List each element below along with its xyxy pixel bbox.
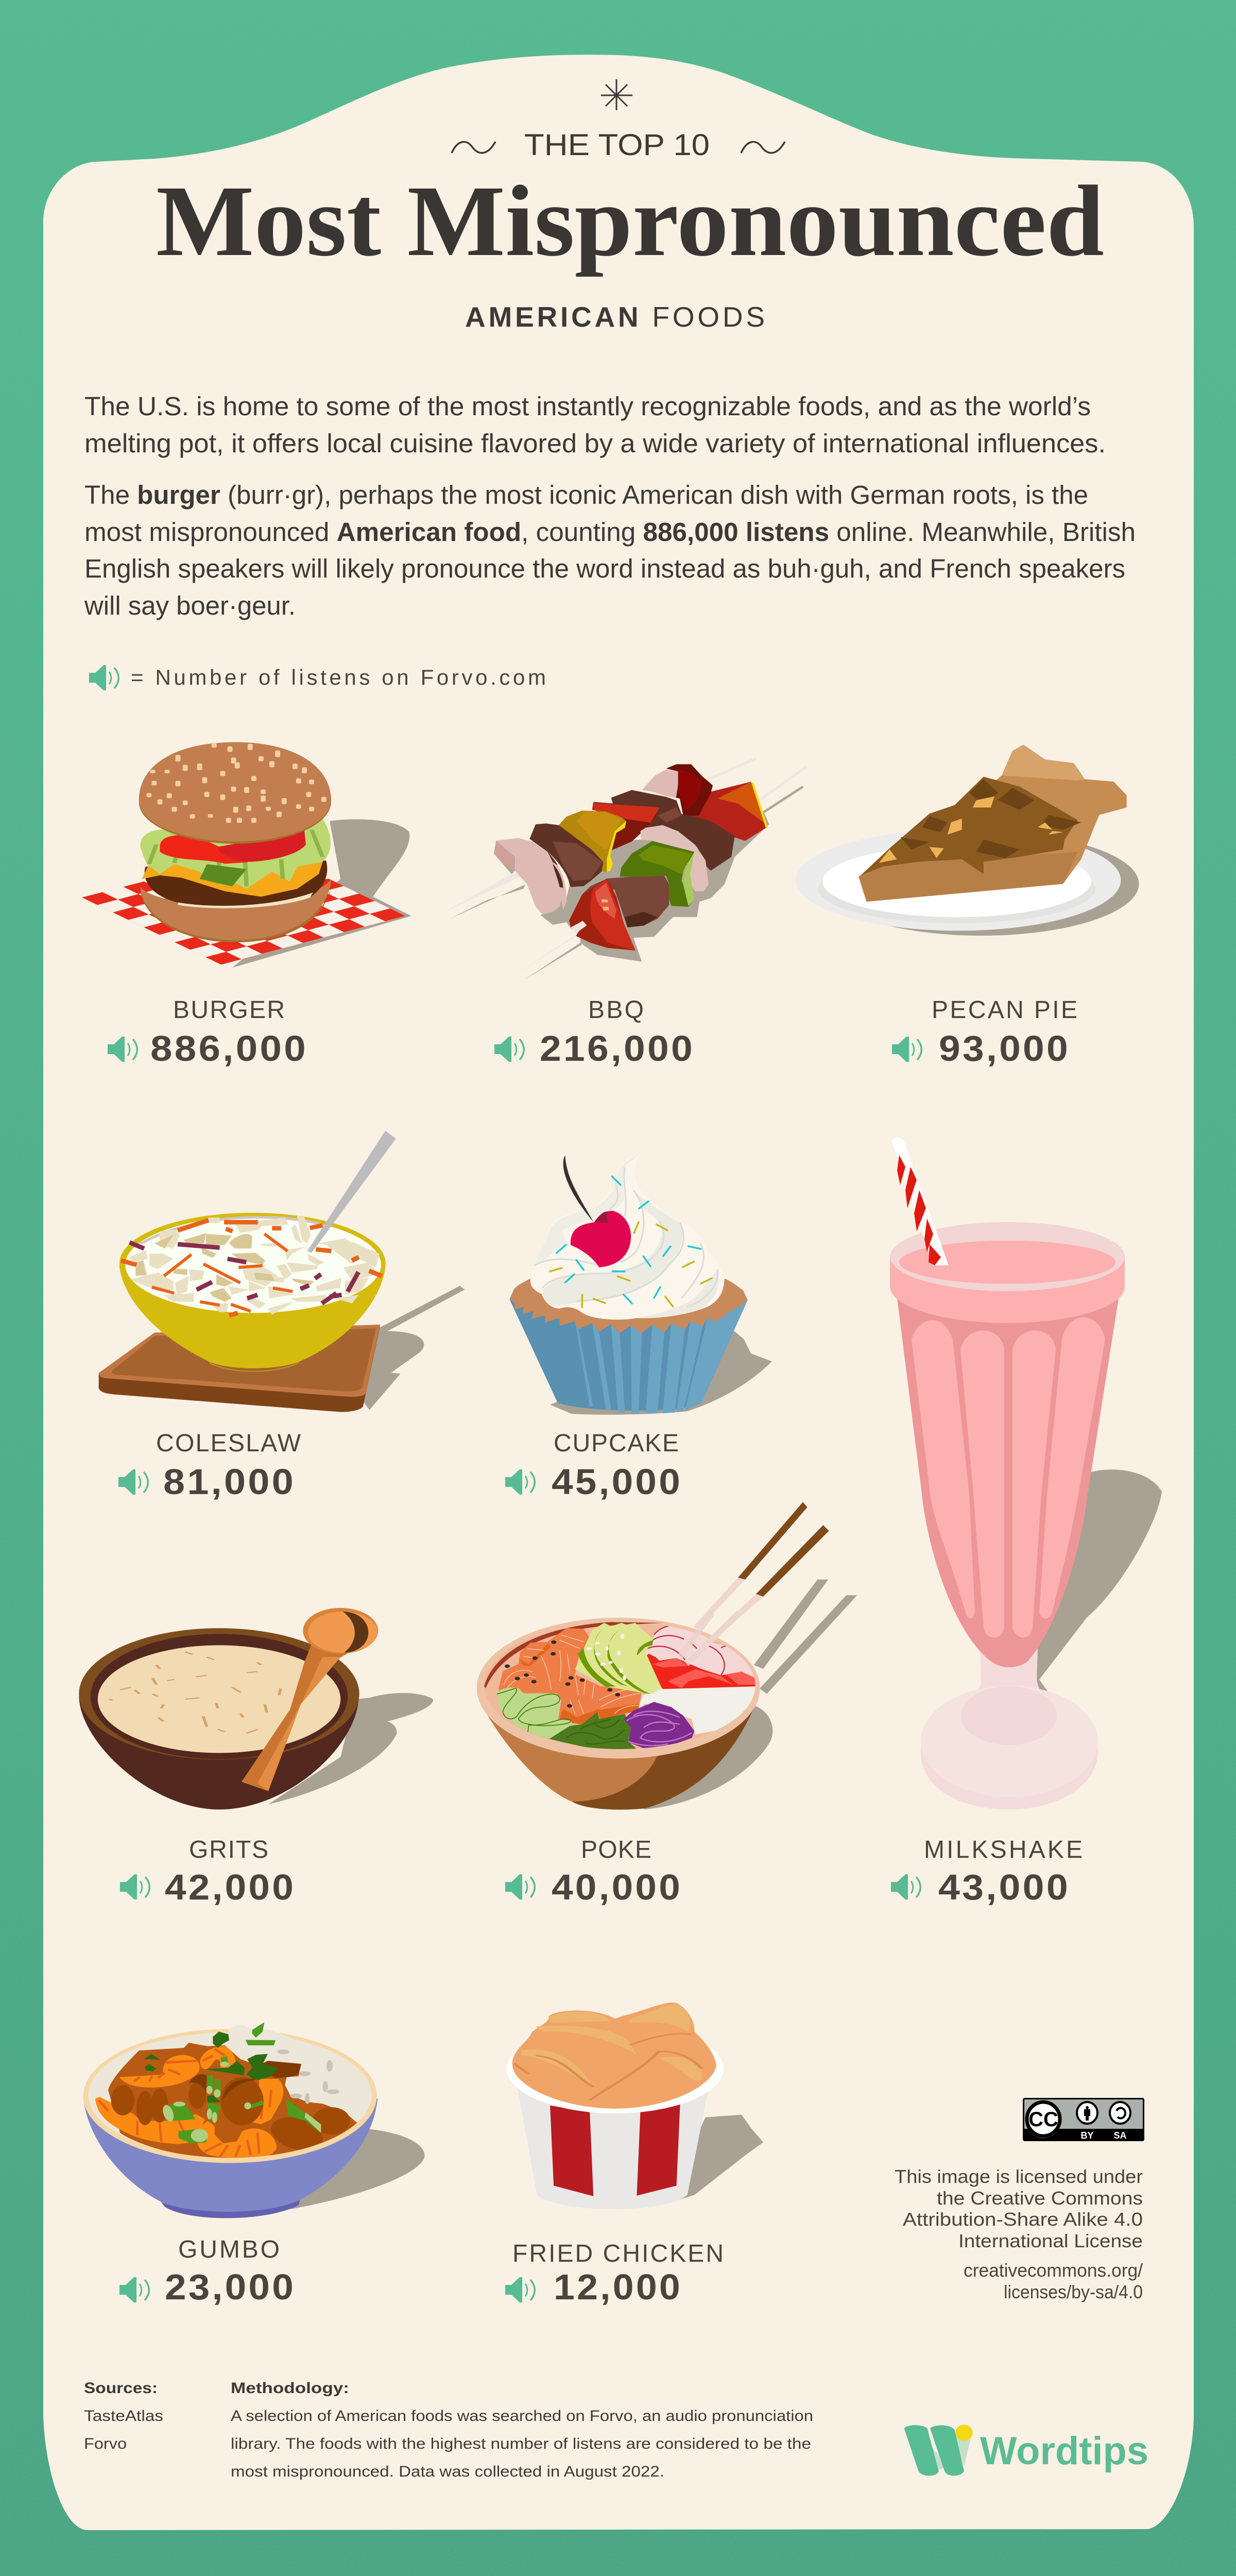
icon: speaker [892, 1037, 921, 1062]
text block: burger paragraph [84, 480, 1136, 620]
sprinkles [550, 1176, 712, 1307]
badge: creative commons: SA [1113, 2130, 1127, 2141]
value: fried chicken: 12,000 [554, 2267, 682, 2307]
food: poke bowl [477, 1618, 760, 1809]
glass body [897, 1298, 1119, 1667]
value: milkshake: 43,000 [938, 1867, 1070, 1907]
text block: intro: The U.S. is home to some of the most instantly recognizable foods, and as the world’s [84, 392, 1091, 421]
text block: methodology [231, 2380, 813, 2480]
icon: speaker [119, 2277, 149, 2302]
label: bbq: BBQ [588, 996, 644, 1024]
straw [892, 1138, 949, 1265]
logo mark [904, 2425, 973, 2476]
shadow: gumbo [290, 2129, 424, 2209]
chopsticks [680, 1502, 829, 1664]
food: grits [79, 1608, 433, 1809]
icon: speaker [505, 1469, 535, 1495]
base and stem [921, 1649, 1098, 1809]
label: gumbo: GUMBO [178, 2236, 280, 2263]
text block: methodology: library. The foods with the highest number of listens are considered to be the [231, 2435, 811, 2452]
icon: speaker [505, 2277, 535, 2302]
chopstick tips [680, 1613, 739, 1664]
glass rim bulge [890, 1257, 1125, 1323]
text block: sources: Sources: [84, 2380, 158, 2397]
label: milkshake: MILKSHAKE [924, 1836, 1083, 1863]
icon: right wave [741, 142, 785, 153]
item labels row 3 [120, 1836, 1083, 1907]
value: pecan pie: 93,000 [939, 1028, 1070, 1069]
cherry stem [563, 1156, 594, 1223]
value: coleslaw: 81,000 [163, 1462, 296, 1502]
shadow: coleslaw [340, 1286, 465, 1410]
text block: burger paragraph: English speakers will likely pronounce the word instead as buh·guh, and French speakers [84, 554, 1125, 583]
pecan pie illustration [796, 744, 1139, 936]
badge: creative commons [1023, 2098, 1144, 2141]
text block: intro [84, 392, 1106, 458]
cherry [571, 1211, 631, 1267]
bowl [83, 2025, 377, 2218]
parsley [213, 2031, 229, 2048]
stew [95, 2043, 372, 2160]
logo wordmark: Wordtips [980, 2429, 1148, 2473]
value: bbq: 216,000 [540, 1028, 695, 1069]
icon: left wave [452, 142, 495, 153]
milk surface [899, 1241, 1115, 1284]
icon: speaker [494, 1037, 524, 1062]
icon: speaker [89, 665, 118, 690]
item labels row 1 [108, 996, 1077, 1069]
text block: license: Attribution-Share Alike 4.0 [903, 2209, 1143, 2230]
icon: speaker [108, 1037, 137, 1062]
text block: methodology: most mispronounced. Data was collected in August 2022. [231, 2463, 664, 2480]
chopstick tops [738, 1502, 829, 1597]
label: pecan pie: PECAN PIE [932, 996, 1077, 1024]
rim ring [890, 1222, 1125, 1291]
food: pecan pie [796, 744, 1139, 936]
logo: wordtips [904, 2425, 1148, 2476]
frosting [530, 1154, 725, 1319]
text block: methodology: Methodology: [231, 2380, 349, 2397]
subtitle: AMERICAN FOODS [465, 301, 765, 333]
text block: burger paragraph: most mispronounced American food, counting 886,000 listens online. Meanwhile, British [84, 517, 1136, 547]
value: grits: 42,000 [165, 1867, 296, 1907]
icon: star ornament [601, 79, 632, 110]
wrapper [509, 1299, 748, 1413]
legend [89, 665, 546, 690]
garnish [246, 2022, 276, 2045]
value: cupcake: 45,000 [552, 1462, 682, 1502]
label: grits: GRITS [189, 1836, 268, 1863]
label: cupcake: CUPCAKE [554, 1430, 679, 1457]
text block: sources [84, 2380, 163, 2452]
fried chicken illustration [507, 2003, 763, 2209]
badge: creative commons: CC [1028, 2108, 1058, 2131]
food: coleslaw [99, 1131, 396, 1412]
slaw [121, 1216, 382, 1315]
label: poke: POKE [581, 1836, 651, 1863]
value: poke: 40,000 [552, 1867, 682, 1907]
cake [509, 1279, 748, 1333]
grits illustration [79, 1608, 433, 1809]
text block: license: the Creative Commons [937, 2188, 1143, 2209]
glass flutes [912, 1317, 1105, 1638]
text block: burger paragraph: will say boer·geur. [84, 591, 296, 620]
food: cupcake [509, 1154, 748, 1413]
text block: burger paragraph: The burger (burr·gr), perhaps the most iconic American dish with German roots, is the [84, 480, 1088, 510]
icon: speaker [118, 1469, 148, 1495]
heading: the top 10 [452, 128, 785, 162]
title: Most Mispronounced [156, 164, 1104, 277]
text block: license [895, 2166, 1143, 2302]
text block: sources: TasteAtlas [84, 2408, 163, 2425]
chopstick lower [693, 1578, 763, 1641]
label: coleslaw: COLESLAW [156, 1430, 301, 1457]
text block: intro: melting pot, it offers local cuisine flavored by a wide variety of international influences. [84, 429, 1106, 458]
shadow: cupcake [550, 1331, 772, 1415]
item labels row 2 [118, 1430, 682, 1502]
board [99, 1325, 380, 1412]
food: gumbo [83, 2022, 377, 2218]
legend text: = Number of listens on Forvo.com [131, 665, 546, 689]
value: burger: 886,000 [150, 1028, 308, 1069]
text block: license: International License [958, 2230, 1143, 2251]
badge: creative commons: BY [1080, 2130, 1094, 2141]
bbq illustration [443, 758, 806, 980]
food: burger [82, 742, 411, 968]
icon: speaker [120, 1874, 149, 1900]
text block: license: licenses/by-sa/4.0 [1004, 2281, 1143, 2302]
food: milkshake [890, 1138, 1162, 1809]
eyebrow text: THE TOP 10 [524, 128, 710, 162]
burger illustration [82, 742, 411, 968]
icon: speaker [891, 1874, 920, 1900]
food: fried chicken [507, 2003, 763, 2209]
shadow: poke [644, 1580, 857, 1809]
value: gumbo: 23,000 [165, 2267, 296, 2307]
label: fried chicken: FRIED CHICKEN [512, 2240, 724, 2267]
toppings [497, 1623, 759, 1749]
bowl [119, 1213, 386, 1372]
food: BBQ skewers [443, 758, 806, 980]
text block: license: creativecommons.org/ [964, 2260, 1143, 2281]
text block: sources: Forvo [84, 2435, 127, 2452]
shadow [1025, 1469, 1162, 1692]
text block: methodology: A selection of American foods was searched on Forvo, an audio pronunciation [231, 2408, 813, 2425]
spoon [307, 1131, 396, 1253]
bowl [477, 1618, 760, 1809]
item labels row 4 [119, 2236, 724, 2307]
icon: speaker [505, 1874, 535, 1900]
text block: license: This image is licensed under [895, 2166, 1143, 2187]
label: burger: BURGER [173, 996, 285, 1024]
